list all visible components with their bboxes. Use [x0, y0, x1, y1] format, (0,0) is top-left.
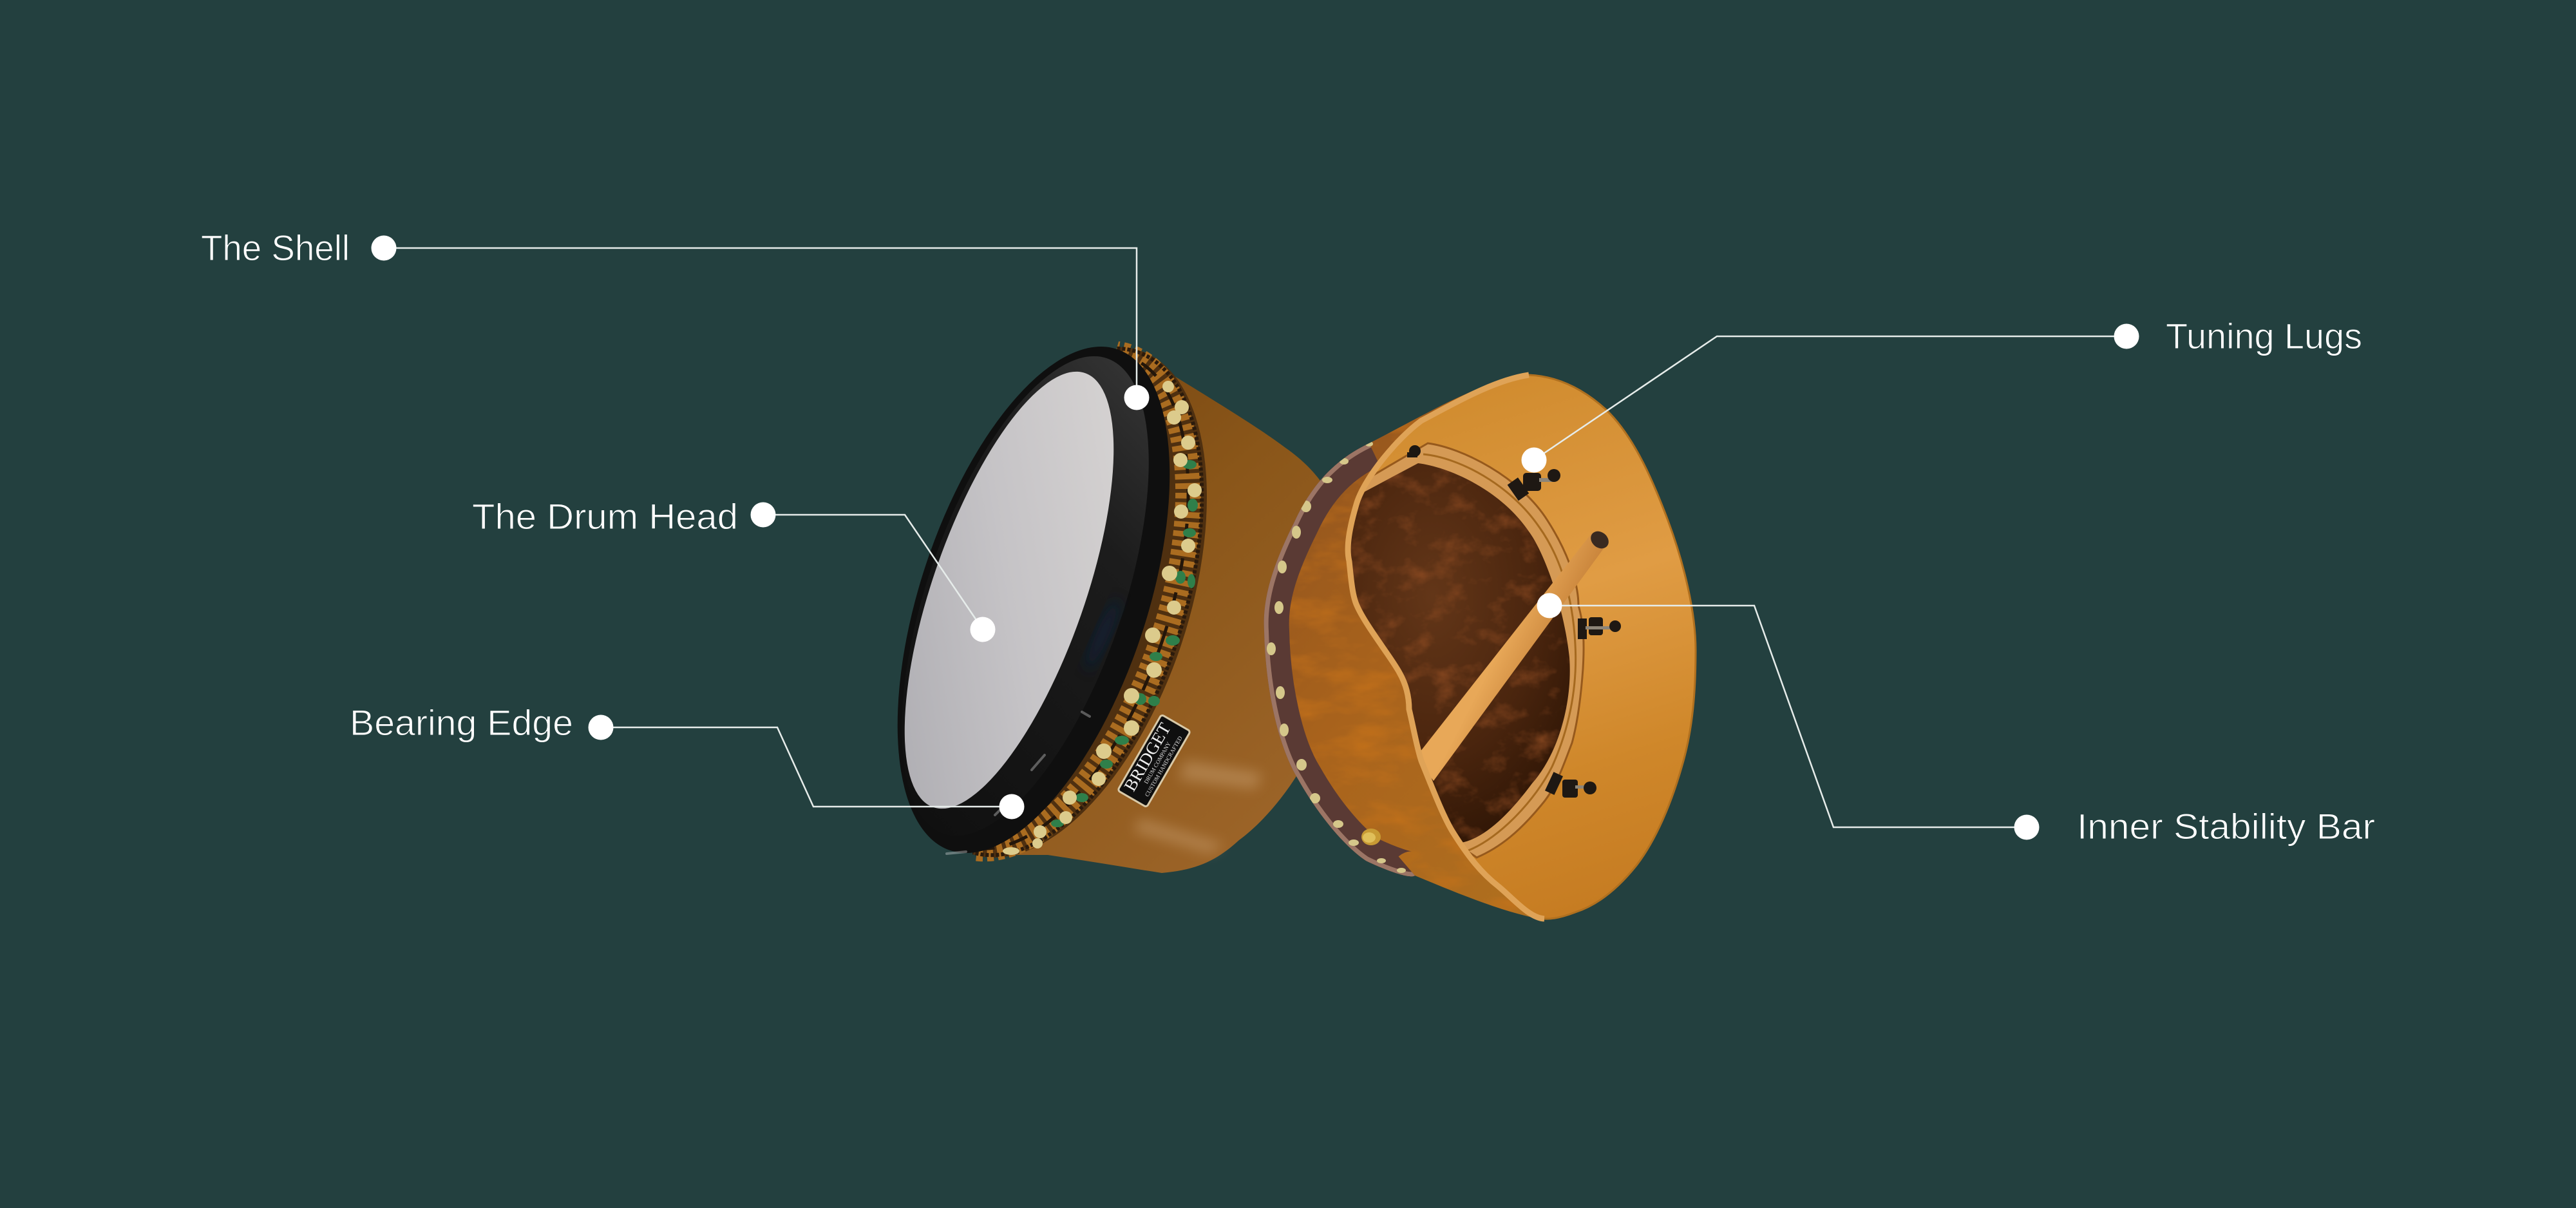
skin mottling — [1351, 469, 1569, 840]
callout: Inner Stability Bar — [1537, 593, 2375, 847]
tuning lug 3 — [1545, 772, 1596, 798]
stability bar — [1416, 533, 1606, 781]
tuning lug 1 — [1508, 469, 1560, 501]
wood grain mottling — [1289, 396, 1518, 914]
callout: Tuning Lugs: Tuning Lugs — [2166, 316, 2362, 356]
brand label: CUSTOM HANDCRAFTED — [1144, 734, 1184, 798]
callout: The Shell: The Shell — [201, 227, 350, 268]
white drum head — [862, 348, 1157, 832]
callout: Bearing Edge: Bearing Edge — [350, 702, 573, 743]
interior hoop, skin, and bar — [1351, 442, 1609, 859]
lip edge — [1348, 375, 1544, 919]
callout: Inner Stability Bar: Inner Stability Bar — [2077, 806, 2375, 847]
rim inner band — [851, 327, 1200, 865]
callout: Bearing Edge — [350, 702, 1024, 820]
tuning lug top — [1407, 445, 1421, 457]
callout: Tuning Lugs — [1521, 316, 2362, 473]
callout: The Drum Head: The Drum Head — [472, 496, 738, 537]
brass screw — [1361, 829, 1381, 845]
callout: The Drum Head — [472, 496, 996, 642]
drum: outer face with white head — [898, 341, 1320, 873]
brand label — [1117, 714, 1191, 807]
tuning lug 2 — [1578, 617, 1621, 639]
rim glints — [947, 712, 1090, 854]
shell sheen — [1133, 760, 1262, 854]
ribbon band — [1264, 441, 1415, 876]
skin head — [1351, 463, 1570, 843]
callout: The Shell — [201, 227, 1149, 410]
brand label: BRIDGET — [1120, 719, 1175, 794]
hoop ring — [1365, 442, 1584, 859]
infographic canvas — [202, 235, 2374, 921]
bar end cap — [1591, 531, 1609, 549]
outer wood body — [1264, 375, 1610, 920]
decorative ribbon band — [972, 341, 1207, 862]
shell body — [977, 351, 1327, 873]
drum: inner view with stability bar — [1262, 374, 1696, 921]
rim blue reflection — [1081, 597, 1124, 673]
hoop groove — [1423, 454, 1576, 850]
brand label: DRUM COMPANY — [1143, 740, 1172, 785]
inner shell — [1348, 375, 1696, 919]
black rim — [843, 313, 1224, 887]
